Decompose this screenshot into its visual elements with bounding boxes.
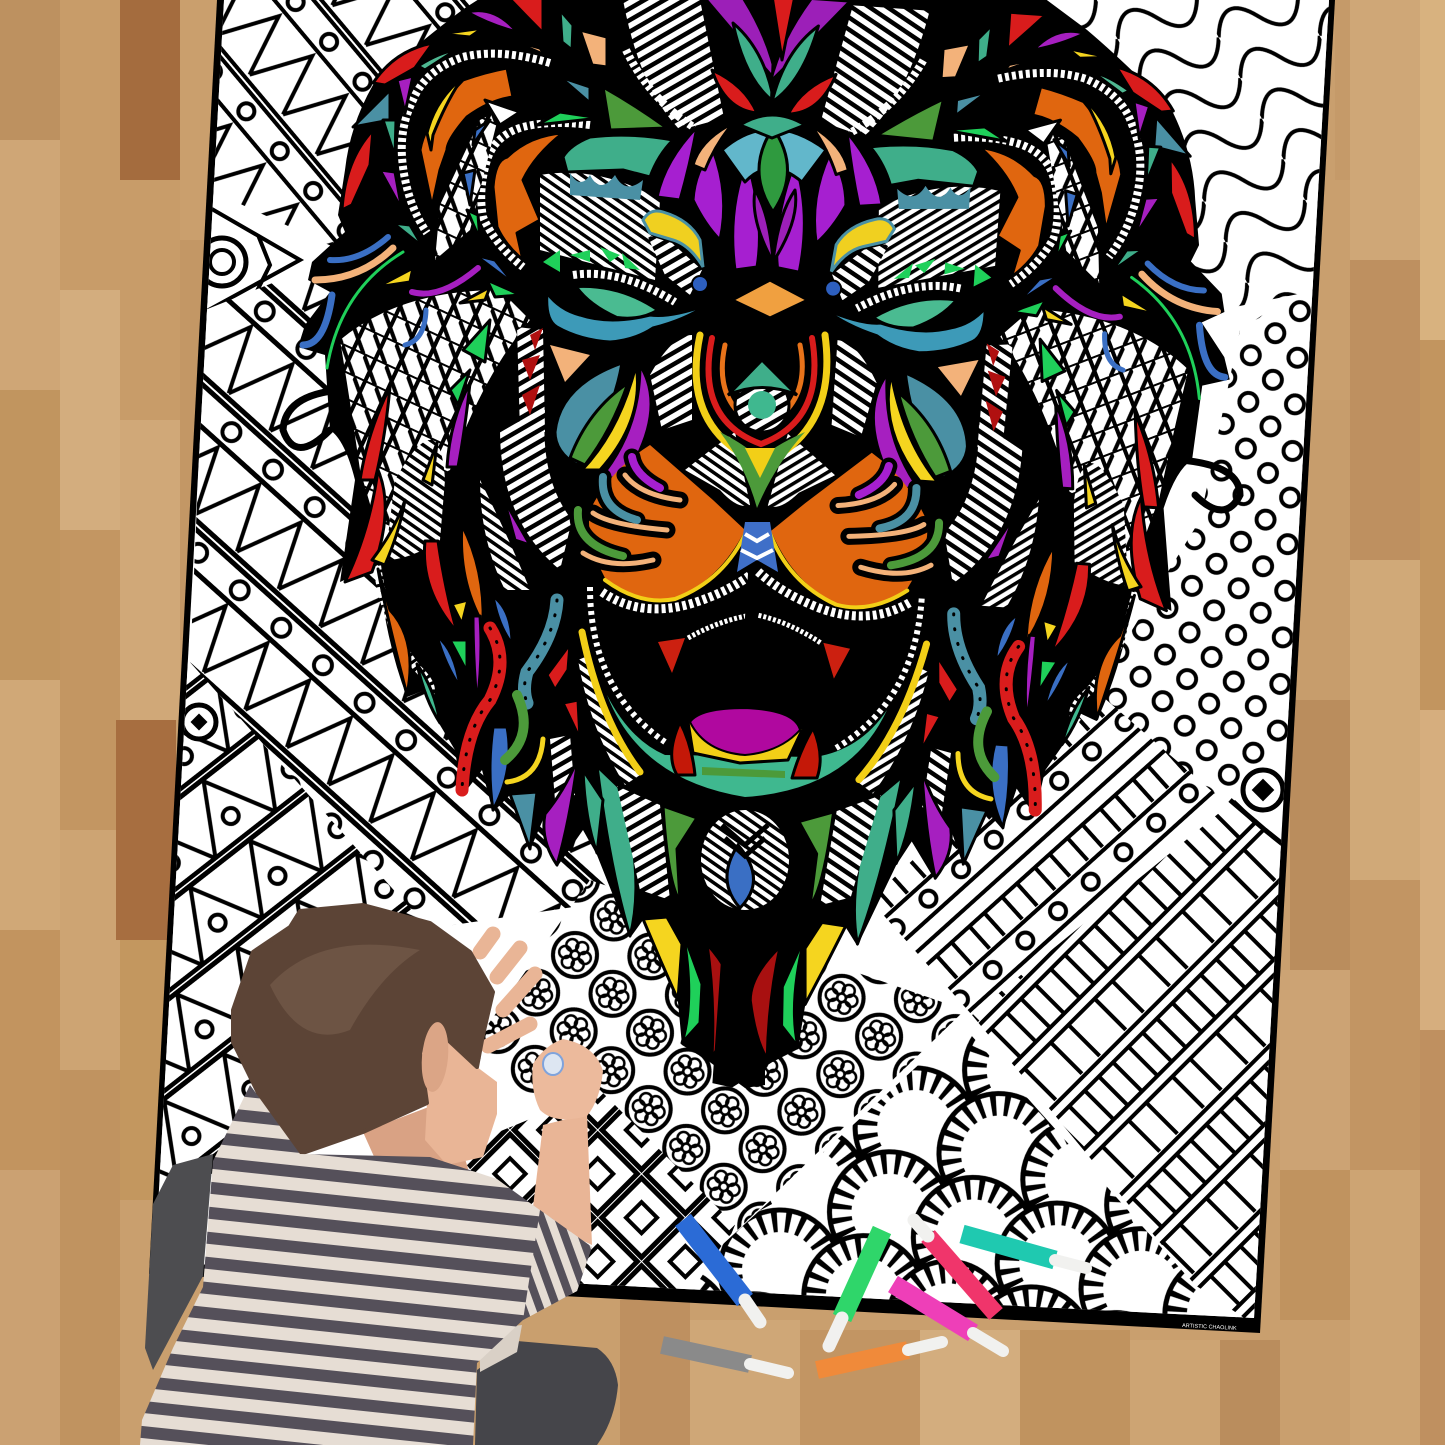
muzzle rim	[605, 530, 747, 600]
nose bridge V	[720, 432, 805, 508]
neck	[363, 1100, 470, 1175]
centre eye crown	[728, 360, 797, 395]
peach mask accent	[550, 345, 590, 382]
centre eye	[748, 391, 776, 419]
yellow jaw trim	[582, 632, 640, 772]
hair highlight	[270, 945, 420, 1035]
marker: blue	[683, 1220, 760, 1322]
top centre ornament	[722, 0, 826, 262]
upper lip stitching	[602, 570, 757, 609]
pattern panel: scales	[694, 1036, 1237, 1318]
poster background patterns	[158, 0, 1329, 1318]
top mane streaks	[342, 0, 667, 285]
marker: pink	[914, 1220, 996, 1314]
nose tip accent	[745, 448, 775, 478]
ear	[419, 1021, 451, 1093]
brow hatching	[540, 173, 660, 280]
rope over top panel	[626, 50, 695, 128]
shirt	[140, 1085, 592, 1445]
pattern panel: lower left triangles	[150, 660, 425, 1180]
marker: gray	[662, 1345, 788, 1373]
face	[420, 1039, 497, 1165]
blue, peach and green side tendrils	[303, 237, 478, 368]
beard ornament	[699, 808, 791, 912]
blue chevron	[737, 522, 778, 572]
pattern panel: squares	[467, 1090, 735, 1290]
marker: magenta	[893, 1284, 1003, 1351]
blue eye dot	[692, 276, 708, 292]
hand	[532, 1039, 603, 1119]
tongue	[690, 708, 800, 755]
lower hatching near mouth	[550, 735, 575, 800]
lion illustration	[283, 0, 1257, 1119]
marker in hand	[543, 1053, 563, 1075]
red braid accents	[522, 328, 543, 415]
chin bar	[702, 767, 785, 778]
right half of lion	[697, 0, 1257, 1119]
rope below brow	[573, 274, 675, 302]
whisker claws	[578, 457, 680, 564]
marker: orange	[817, 1342, 942, 1370]
pattern panel: right corner ornament	[1230, 770, 1290, 850]
hair	[233, 905, 493, 1154]
nose stripes	[696, 335, 827, 464]
mouth side stitching	[590, 587, 665, 742]
lower teeth	[672, 722, 820, 778]
rope mane band	[375, 545, 431, 700]
left half of lion	[298, 0, 780, 1088]
muzzle lobe	[589, 445, 745, 599]
pattern panel: left zigzag bands	[190, 260, 620, 930]
pattern panel: left circle ornament	[206, 194, 304, 318]
pattern panel: stripes and dots	[881, 708, 1214, 1015]
top hatch panel	[623, 0, 724, 130]
petal hatching	[647, 235, 702, 295]
red centre plume streak	[712, 70, 757, 113]
orange cheek crescent	[493, 133, 563, 260]
bright green mask accents	[543, 247, 640, 272]
pattern panel: left ornament	[182, 705, 216, 739]
inner mouth stitching	[688, 615, 752, 638]
cheek feather	[555, 363, 651, 478]
red dotted tendril	[462, 628, 500, 790]
mane silhouette	[298, 0, 780, 1088]
eye	[577, 287, 657, 318]
raised fingers	[480, 934, 535, 1046]
nose side hatching	[685, 432, 750, 506]
sleeve	[523, 1210, 592, 1320]
face side hatching	[500, 410, 572, 570]
brow scallops	[570, 173, 643, 200]
lower-left mane tessellation	[340, 290, 530, 555]
rope outer arc	[402, 54, 550, 233]
yellow crescent	[427, 77, 463, 150]
beard green panel	[663, 806, 697, 901]
small mane accents	[360, 268, 520, 485]
orange crescent	[420, 68, 513, 207]
pattern panel: waves	[1080, 0, 1329, 310]
green and yellow hook	[505, 695, 543, 782]
fang	[658, 638, 685, 673]
pattern panel: circle grid	[1095, 280, 1315, 800]
brow hatching over nose	[650, 335, 692, 430]
top plumes	[703, 0, 777, 102]
mane gap hatching	[480, 480, 530, 590]
beard teal inner	[583, 770, 603, 853]
tongue base	[688, 722, 803, 763]
mid mane feathers	[385, 440, 445, 560]
pattern panel: flowers	[470, 880, 965, 1245]
centre eye ring	[735, 378, 789, 432]
teal dotted tendril	[524, 600, 557, 703]
grey knee	[145, 1154, 213, 1370]
marker: teal	[962, 1234, 1086, 1268]
poster sheet	[149, 0, 1335, 1333]
teal brow	[563, 135, 673, 177]
beard teal side	[597, 766, 636, 936]
trousers	[475, 1341, 618, 1445]
cream undershirt	[480, 1325, 522, 1372]
marker: green	[829, 1230, 882, 1346]
eye rim	[547, 293, 707, 342]
poster credit text: ARTISTIC CHAOLINK	[1182, 1323, 1237, 1332]
chin band	[607, 695, 887, 797]
beard tips	[643, 917, 733, 1057]
red braid	[517, 327, 545, 432]
brow centre	[732, 280, 808, 318]
boy	[140, 905, 618, 1445]
lower mane streaks	[345, 470, 580, 865]
jaw trim hatching	[578, 655, 640, 785]
pattern panel: upper left zigzag	[210, 0, 480, 250]
purple flames	[657, 123, 759, 270]
yellow petal	[643, 211, 703, 267]
pattern panel: hatched bars	[972, 800, 1290, 1330]
arm	[532, 1114, 592, 1245]
mane curls	[283, 390, 1240, 510]
beard hatching	[617, 786, 670, 900]
rope inner arc	[481, 123, 590, 267]
hatch strip between arcs	[435, 110, 500, 260]
